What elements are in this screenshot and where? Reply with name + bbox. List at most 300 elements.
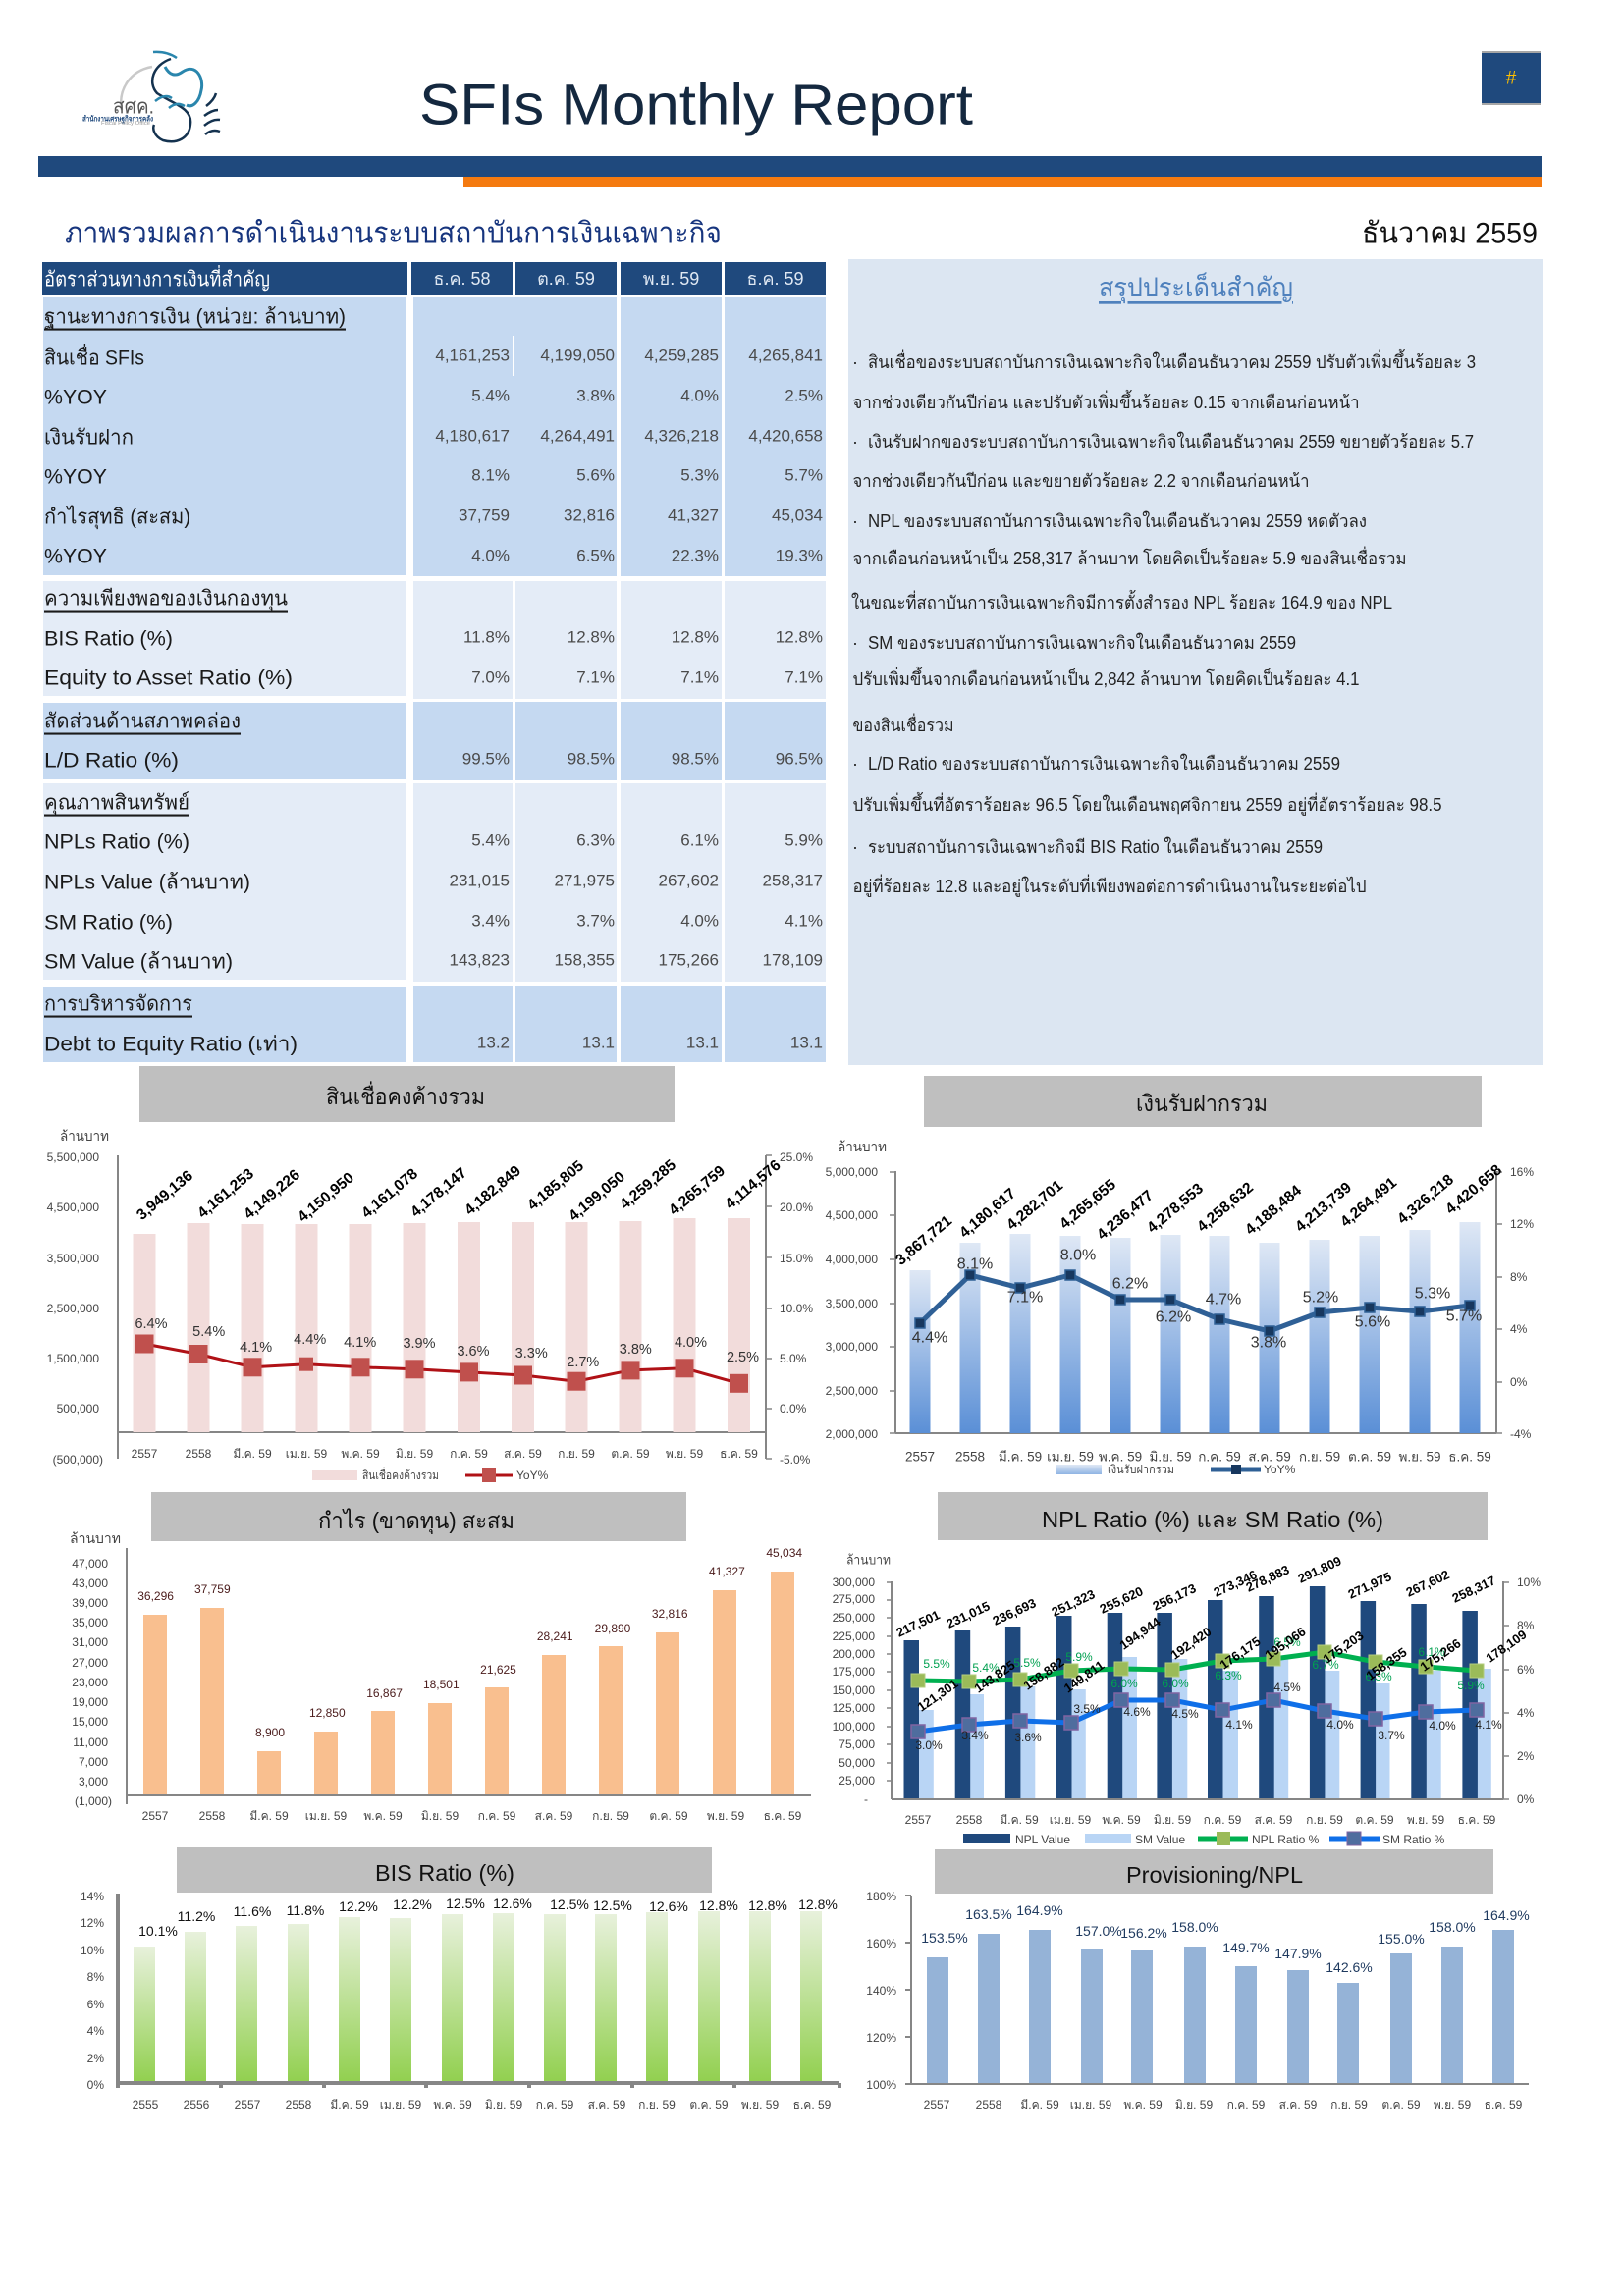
category labels: 2558 [976,2098,1002,2111]
category labels: มิ.ย. 59 [421,1809,459,1823]
summary text: · [852,754,858,774]
left axis labels: 2,500,000 [47,1302,99,1315]
category labels: ก.ค. 59 [536,2098,574,2111]
category labels: ต.ค. 59 [649,1809,688,1823]
value labels: 12,850 [309,1706,346,1720]
right axis labels: 15.0% [780,1252,813,1265]
unit label: ล้านบาท [60,1128,109,1144]
SM value labels: 194,944 [1116,1614,1164,1653]
NPL ratio labels: 5.9% [1457,1679,1485,1692]
deposit bars [909,1222,1481,1433]
value labels: 4,178,147 [407,1164,470,1221]
value labels: 12.8% [699,1897,738,1913]
value labels: 4,420,658 [1442,1161,1505,1218]
yoy labels: 5.7% [1446,1308,1482,1325]
SM ratio labels: 4.6% [1123,1705,1151,1719]
right axis labels: 0% [1510,1375,1528,1389]
left axis labels [833,1575,875,1806]
NPL value labels: 251,323 [1050,1586,1097,1620]
right axis labels: -5.0% [780,1453,811,1467]
category labels: ธ.ค. 59 [720,1447,758,1461]
table section: financial position: %YOY [44,465,107,489]
right axis labels: 4% [1510,1322,1528,1336]
table section: capital adequacy: 7.1% [785,667,823,687]
chart: BIS ratio [81,1847,839,2111]
table section: capital adequacy: Equity to Asset Ratio (%) [44,667,293,689]
y axis labels: 31,000 [72,1635,108,1649]
category labels: ต.ค. 59 [689,2098,729,2111]
category labels: ก.ย. 59 [592,1809,629,1823]
summary text: L/D Ratio ของระบบสถาบันการเงินเฉพาะกิจในเดือนธันวาคม 2559 [868,753,1340,774]
value labels: 11.2% [178,1908,215,1924]
SM ratio labels: 4.1% [1225,1718,1253,1732]
value labels: 45,034 [766,1546,802,1560]
yoy labels: 3.9% [403,1336,436,1352]
y axis labels: 23,000 [72,1676,108,1689]
category labels: 2557 [924,2098,950,2111]
y axis labels: 39,000 [72,1596,108,1610]
right axis labels: 0% [1517,1792,1535,1806]
category labels: ก.ย. 59 [558,1447,595,1461]
SM ratio labels: 3.6% [1014,1731,1042,1744]
legend: SM Ratio % [1382,1833,1445,1846]
category labels [924,2098,1523,2111]
value labels [138,1896,838,1939]
category labels: 2557 [235,2098,261,2111]
value labels: 4,278,553 [1144,1180,1207,1237]
summary text: SM ของระบบสถาบันการเงินเฉพาะกิจในเดือนธันวาคม 2559 [868,632,1296,653]
table section: asset quality: 3.7% [576,911,615,931]
table header: ธ.ค. 59 [746,269,804,289]
category labels: ส.ค. 59 [535,1809,573,1823]
category labels: ธ.ค. 59 [764,1809,802,1823]
category labels: 2558 [956,1813,983,1827]
yoy labels: 5.2% [1303,1290,1338,1306]
summary text: เงินรับฝากของระบบสถาบันการเงินเฉพาะกิจในเดือนธันวาคม 2559 ขยายตัวร้อยละ 5.7 [868,431,1474,452]
legend [1056,1463,1296,1476]
yoy labels: 3.8% [620,1342,652,1358]
table section: financial position: 3.8% [576,387,615,404]
table section: liquidity [43,702,826,780]
chart: accumulated profit [70,1492,811,1823]
legend [312,1467,549,1482]
NPL value labels: 231,015 [945,1598,992,1631]
chart title: กำไร (ขาดทุน) สะสม [318,1508,514,1534]
left axis labels: 125,000 [833,1701,875,1715]
table section: management [43,986,826,1062]
y axis labels [72,1557,112,1808]
chart: total deposits [826,1076,1534,1476]
category labels: พ.ค. 59 [341,1447,380,1461]
category labels: ต.ค. 59 [611,1447,650,1461]
category labels [133,2098,832,2111]
value labels: 16,867 [366,1686,403,1700]
yoy labels: 7.1% [1007,1290,1043,1306]
category labels: พ.ย. 59 [1407,1813,1444,1827]
SM ratio labels: 3.5% [1073,1702,1101,1716]
left axis labels: 4,500,000 [826,1208,878,1222]
category labels: ก.ค. 59 [1227,2098,1266,2111]
page number box: # [1506,69,1517,88]
category labels: ก.ย. 59 [1299,1449,1340,1465]
value labels: 4,161,253 [194,1165,257,1222]
value labels: 155.0% [1378,1931,1425,1947]
axes [905,1896,1529,2084]
right axis labels: 4% [1517,1706,1535,1720]
table section: management: การบริหารจัดการ [44,993,192,1015]
NPL value labels: 271,975 [1346,1569,1393,1602]
table section: financial position: 22.3% [672,546,719,565]
summary text: ของสินเชื่อรวม [852,713,954,735]
legend: SM Value [1135,1833,1185,1846]
axes [127,1548,811,1804]
value labels: 142.6% [1326,1959,1373,1975]
NPL value labels [894,1553,1497,1640]
logo: สศค. [113,96,154,118]
table section: liquidity: 98.5% [672,750,719,768]
table section: management: 13.1 [582,1033,615,1052]
page number box [1482,51,1541,105]
yoy labels: 4.0% [675,1335,707,1351]
SM ratio labels [915,1681,1502,1752]
yoy labels: 5.3% [1415,1286,1450,1302]
NPL ratio labels: 5.5% [923,1657,950,1671]
SM value labels: 178,109 [1483,1627,1530,1666]
y axis labels: 120% [866,2031,896,2045]
table section: financial position: 4,420,658 [748,426,823,446]
NPL value labels: 236,693 [991,1595,1038,1629]
SM ratio labels: 3.4% [961,1729,989,1742]
yoy labels: 4.7% [1206,1292,1241,1308]
table section: asset quality: 271,975 [555,872,615,889]
table section: liquidity: 96.5% [776,750,823,768]
NPL value labels: 291,809 [1296,1553,1343,1586]
chart: total loans [47,1066,813,1482]
summary text: ปรับเพิ่มขึ้นที่อัตราร้อยละ 96.5 โดยในเดือนพฤศจิกายน 2559 อยู่ที่อัตราร้อยละ 98.5 [852,792,1441,816]
NPL ratio labels: 5.5% [1013,1656,1041,1670]
title: SFIs Monthly Report [419,73,973,137]
y axis labels: 12% [81,1916,104,1930]
value labels: 153.5% [921,1930,968,1946]
category labels: ธ.ค. 59 [1458,1813,1496,1827]
category labels: ส.ค. 59 [504,1447,542,1461]
category labels: มี.ค. 59 [249,1809,289,1823]
category labels: เม.ย. 59 [1050,1813,1092,1827]
value labels: 156.2% [1120,1925,1167,1941]
y axis labels: 47,000 [72,1557,108,1571]
table section: financial position: ฐานะทางการเงิน (หน่วย: ล้านบาท) [44,306,346,328]
header bands [38,156,1542,187]
NPL value labels: 278,883 [1244,1562,1291,1595]
category labels: 2557 [905,1813,932,1827]
table section: asset quality: SM Ratio (%) [44,911,173,934]
NPL ratio labels: 6.5% [1273,1635,1301,1649]
category labels: ธ.ค. 59 [1448,1449,1491,1465]
table section: financial position: 32,816 [564,507,615,524]
category labels [905,1449,1491,1465]
table section: financial position: 5.4% [471,387,510,404]
category labels: เม.ย. 59 [305,1809,348,1823]
yoy labels: 5.4% [192,1324,225,1340]
y axis labels: 7,000 [79,1755,108,1769]
table section: capital adequacy: 7.1% [680,667,719,687]
category labels: พ.ย. 59 [1398,1449,1441,1465]
NPL ratio labels: 6.3% [1215,1669,1242,1682]
category labels: ก.ย. 59 [1330,2098,1368,2111]
value labels: 28,241 [537,1629,573,1643]
left axis labels: 250,000 [833,1611,875,1625]
NPL ratio labels: 6.3% [1365,1670,1392,1683]
value labels: 12.8% [798,1896,838,1912]
category labels: เม.ย. 59 [286,1447,328,1461]
category labels: มี.ค. 59 [999,1449,1042,1465]
category labels: ส.ค. 59 [1279,2098,1318,2111]
value labels: 37,759 [194,1582,231,1596]
value labels: 4,265,655 [1056,1176,1119,1233]
left axis labels: 2,500,000 [826,1384,878,1398]
y axis labels: 19,000 [72,1695,108,1709]
legend: สินเชื่อคงค้างรวม [362,1467,439,1482]
category labels: มิ.ย. 59 [1154,1813,1191,1827]
value labels: 3,949,136 [134,1167,196,1224]
yoy labels: 4.1% [240,1340,272,1356]
category labels: มี.ค. 59 [1000,1813,1039,1827]
provisioning bars [927,1930,1514,2083]
table section: asset quality: 158,355 [555,950,615,970]
category labels: พ.ย. 59 [741,2098,779,2111]
yoy labels: 3.3% [515,1346,548,1362]
y axis labels: 2% [87,2052,104,2065]
category labels [905,1813,1496,1827]
yoy labels: 4.1% [344,1335,376,1351]
chart title [935,1849,1493,1894]
NPL ratio labels: 6.7% [1312,1658,1339,1672]
y axis labels [81,1890,104,2092]
SM value labels: 192,420 [1167,1624,1215,1663]
NPL ratio labels: 5.4% [972,1661,1000,1675]
table section: management: 13.1 [686,1033,719,1052]
legend: YoY% [516,1468,549,1482]
value labels: 164.9% [1016,1902,1063,1918]
SM ratio labels: 4.1% [1475,1718,1502,1732]
table section: financial position: 4.0% [680,387,719,404]
chart title [139,1066,675,1122]
table section: management: 13.1 [790,1033,823,1052]
yoy labels: 6.4% [135,1316,168,1332]
y axis labels: 4% [87,2024,104,2038]
summary text [851,349,1476,897]
table section: asset quality: คุณภาพสินทรัพย์ [44,791,189,815]
chart title [151,1492,686,1541]
value labels: 4,258,632 [1194,1179,1257,1236]
category labels: มิ.ย. 59 [485,2098,522,2111]
summary text: อยู่ที่ร้อยละ 12.8 และอยู่ในระดับที่เพียงพอต่อการดำเนินงานในระยะต่อไป [852,874,1367,897]
NPL value labels: 258,317 [1450,1573,1497,1606]
value labels: 36,296 [137,1589,174,1603]
table section: asset quality: 231,015 [450,872,510,889]
category labels [132,1447,758,1461]
SM ratio labels: 4.5% [1171,1707,1199,1721]
value labels: 4,326,218 [1394,1171,1457,1228]
value labels: 157.0% [1075,1923,1122,1939]
right axis labels: 10.0% [780,1302,813,1315]
category labels: ก.ค. 59 [1204,1813,1242,1827]
value labels: 11.6% [234,1903,271,1919]
category labels: พ.ค. 59 [433,2098,472,2111]
category labels: พ.ย. 59 [666,1447,703,1461]
axes [887,1581,1509,1799]
table section: financial position: 4,326,218 [644,426,719,446]
legend: เงินรับฝากรวม [1108,1463,1174,1476]
value labels: 158.0% [1429,1919,1476,1935]
table section: capital adequacy: 12.8% [568,628,615,646]
category labels: 2558 [286,2098,312,2111]
left axis labels [47,1150,103,1467]
table header: ต.ค. 59 [537,269,595,289]
value labels: 4,150,950 [295,1169,357,1226]
category labels: มิ.ย. 59 [396,1447,433,1461]
table section: asset quality: 178,109 [763,950,823,970]
table section: financial position: 5.6% [576,465,615,485]
yoy labels: 6.2% [1112,1276,1148,1292]
left axis labels: 5,500,000 [47,1150,99,1164]
axes [890,1171,1502,1433]
value labels: 4,236,477 [1094,1187,1157,1244]
left axis labels: 175,000 [833,1665,875,1679]
value labels: 4,259,285 [617,1156,679,1213]
category labels: มิ.ย. 59 [1149,1449,1192,1465]
section heading: ภาพรวมผลการดำเนินงานระบบสถาบันการเงินเฉพาะกิจ [65,218,722,249]
value labels: 3,867,721 [893,1212,955,1269]
table section: liquidity: สัดส่วนด้านสภาพคล่อง [44,711,241,732]
right axis labels: 8% [1510,1270,1528,1284]
table section: asset quality: 3.4% [471,911,510,931]
category labels: ก.ย. 59 [1306,1813,1343,1827]
value labels: 41,327 [709,1565,745,1578]
y axis labels: 10% [81,1944,104,1957]
right axis labels: 6% [1517,1663,1535,1677]
chart title: BIS Ratio (%) [375,1860,514,1886]
category labels: เม.ย. 59 [380,2098,422,2111]
table section: financial position [43,297,826,576]
table section: financial position: 8.1% [471,465,510,485]
left axis labels: 25,000 [839,1774,875,1788]
y axis labels: 43,000 [72,1576,108,1590]
table section: liquidity: 98.5% [568,750,615,768]
y axis labels [866,1890,896,2092]
right axis labels [780,1150,813,1467]
left axis labels: 2,000,000 [826,1427,878,1441]
legend: YoY% [1264,1463,1296,1476]
value labels: 29,890 [595,1622,631,1635]
y axis labels: 11,000 [73,1735,108,1749]
SM value labels: 158,882 [1020,1654,1067,1693]
report date: ธันวาคม 2559 [1362,218,1538,249]
left axis labels: 500,000 [57,1402,99,1415]
left axis labels: 3,500,000 [826,1297,878,1310]
value labels: 12.6% [493,1896,532,1911]
table section: financial position: 4,161,253 [435,346,510,365]
logo [82,52,220,141]
summary text: · [852,511,858,531]
y axis labels: 140% [866,1984,896,1998]
chart title: Provisioning/NPL [1126,1862,1303,1888]
header [38,51,1542,187]
category labels: พ.ค. 59 [1123,2098,1163,2111]
SM ratio labels: 4.0% [1326,1718,1354,1732]
value labels: 163.5% [965,1906,1012,1922]
left axis labels: 200,000 [833,1647,875,1661]
table section: capital adequacy: 12.8% [776,628,823,646]
summary heading: สรุปประเด็นสำคัญ [1099,270,1293,304]
y axis labels: 180% [866,1890,896,1903]
left axis labels: 100,000 [833,1720,875,1734]
logo: Fiscal Policy Office [101,121,150,127]
category labels: พ.ค. 59 [1099,1449,1142,1465]
y axis labels: 14% [81,1890,104,1903]
value labels: 12.2% [393,1896,432,1912]
table section: capital adequacy: 11.8% [463,628,510,646]
chart title [177,1847,712,1893]
SM ratio labels: 3.0% [915,1738,943,1752]
yoy labels: 6.2% [1156,1309,1191,1325]
left axis labels: 5,000,000 [826,1165,878,1179]
left axis labels: 50,000 [839,1756,875,1770]
SM value labels: 121,301 [914,1676,961,1715]
table header: ธ.ค. 58 [433,269,491,289]
table section: asset quality: 143,823 [450,950,510,970]
value labels: 4,180,617 [956,1185,1019,1242]
left axis labels: 150,000 [833,1683,875,1697]
value labels: 4,264,491 [1337,1174,1400,1231]
value labels: 12.8% [748,1897,787,1913]
y axis labels: 8% [87,1970,104,1984]
left axis labels: 300,000 [833,1575,875,1589]
unit label: ล้านบาท [846,1553,891,1567]
value labels: 4,161,078 [358,1165,421,1222]
table section: asset quality: 6.3% [576,830,615,850]
category labels: พ.ค. 59 [1102,1813,1141,1827]
SM value labels: 175,203 [1320,1628,1367,1667]
NPL ratio labels [923,1635,1485,1692]
value labels: 149.7% [1222,1940,1270,1955]
summary text: ระบบสถาบันการเงินเฉพาะกิจมี BIS Ratio ในเดือนธันวาคม 2559 [868,836,1323,857]
table section: asset quality: SM Value (ล้านบาท) [44,950,233,974]
table section: asset quality: 4.1% [785,911,823,931]
SM ratio line [911,1693,1484,1738]
NPL ratio labels: 6.0% [1162,1677,1189,1690]
table section: financial position: 4.0% [471,546,510,565]
category labels: 2558 [199,1809,226,1823]
table section: asset quality: NPLs Value (ล้านบาท) [44,872,250,893]
category labels: 2557 [142,1809,169,1823]
value labels: 32,816 [652,1607,688,1621]
left axis labels [826,1165,878,1441]
right axis labels: -4% [1510,1427,1532,1441]
value labels: 12.2% [339,1898,378,1914]
SM value labels: 143,825 [971,1657,1018,1696]
category labels: 2555 [133,2098,159,2111]
table section: liquidity: 99.5% [462,750,510,768]
category labels: มี.ค. 59 [330,2098,369,2111]
left axis labels: 75,000 [839,1737,875,1751]
legend [963,1832,1445,1846]
NPL ratio labels: 6.0% [1110,1677,1138,1690]
table section: management: 13.2 [477,1033,510,1052]
yoy labels: 8.0% [1060,1247,1096,1264]
table section: financial position: 41,327 [668,507,719,524]
y axis labels: 6% [87,1998,104,2011]
